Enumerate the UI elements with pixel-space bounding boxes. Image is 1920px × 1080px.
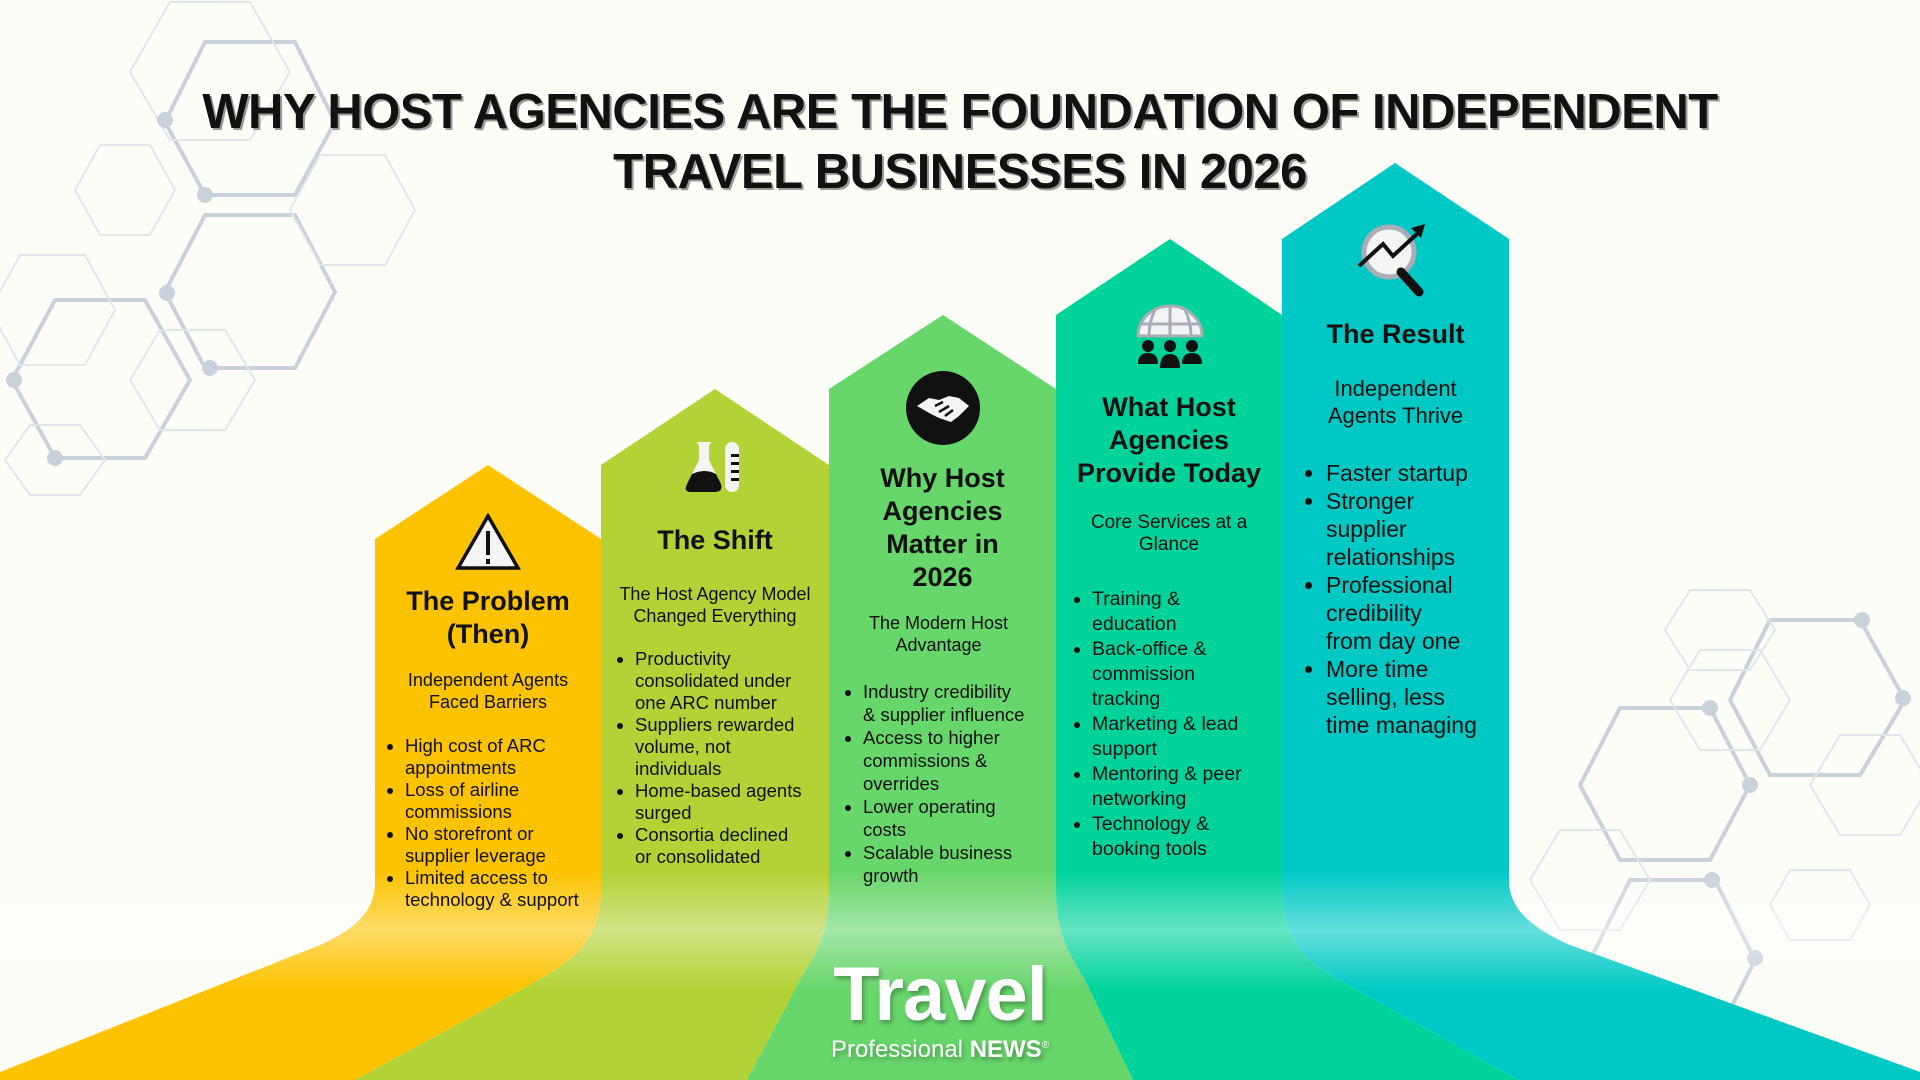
subtitle: Changed Everything	[633, 606, 797, 626]
subtitle: Faced Barriers	[429, 692, 547, 712]
bullet list	[1074, 588, 1242, 860]
subtitle	[619, 584, 811, 626]
icon: handshake	[906, 371, 980, 445]
bullet list: Faster startup	[1326, 460, 1468, 486]
icon: lab flask	[686, 442, 739, 492]
bullet list: Marketing & lead	[1092, 713, 1238, 735]
heading: The Shift	[657, 525, 773, 555]
heading	[406, 586, 570, 649]
title: WHY HOST AGENCIES ARE THE FOUNDATION OF INDEPENDENT	[202, 85, 1718, 139]
bullet list: costs	[863, 819, 906, 840]
subtitle	[1328, 376, 1463, 428]
bullet list: Training &	[1092, 588, 1180, 610]
panel: what host agencies provide	[1074, 304, 1261, 860]
subtitle: The Modern Host	[869, 613, 1008, 633]
bullet list: & supplier influence	[863, 704, 1024, 725]
column 1: problem	[0, 465, 601, 1080]
title: TRAVEL BUSINESSES IN 2026	[613, 145, 1307, 199]
bullet list: Scalable business	[863, 842, 1012, 863]
icon: magnifier with trend arrow	[1358, 224, 1425, 296]
heading: 2026	[912, 562, 973, 592]
bullet list: individuals	[635, 758, 721, 779]
column 5: result	[1282, 163, 1920, 1080]
subtitle: Advantage	[895, 635, 982, 655]
subtitle: The Host Agency Model	[619, 584, 811, 604]
heading	[1077, 392, 1261, 488]
bullet list: Professional	[1326, 572, 1453, 598]
bullet list: from day one	[1326, 628, 1460, 654]
bullet list: High cost of ARC	[405, 735, 546, 756]
column 2: shift	[355, 389, 829, 1080]
bullet list: networking	[1092, 788, 1186, 810]
subtitle: Core Services at a	[1091, 512, 1247, 533]
heading: Agencies	[1109, 425, 1229, 455]
bullet list: commissions &	[863, 750, 987, 771]
bullet list: education	[1092, 613, 1177, 635]
bullet list	[1305, 460, 1477, 738]
bullet list: Lower operating	[863, 796, 996, 817]
icon: globe with people	[1136, 304, 1204, 368]
bullet list	[387, 735, 579, 910]
bullet list: volume, not	[635, 736, 731, 757]
bullet list: commission	[1092, 663, 1195, 685]
subtitle	[869, 613, 1008, 655]
bullet list: appointments	[405, 757, 516, 778]
icon: warning	[455, 513, 521, 570]
logo: Travel Professional NEWS: Travel	[833, 952, 1047, 1037]
bullet list: one ARC number	[635, 692, 777, 713]
bullet list: No storefront or	[405, 823, 534, 844]
bullet list: Suppliers rewarded	[635, 714, 794, 735]
bullet list	[617, 648, 802, 867]
bullet list: supplier leverage	[405, 845, 546, 866]
subtitle: Independent	[1334, 376, 1457, 401]
heading	[880, 463, 1005, 592]
bullet list: Back-office &	[1092, 638, 1207, 660]
subtitle: Independent Agents	[408, 670, 568, 690]
bullet list: Consortia declined	[635, 824, 788, 845]
heading: What Host	[1102, 392, 1236, 422]
panel: why host agencies matter	[845, 371, 1024, 886]
column 3: why matter	[747, 315, 1133, 1080]
heading: The Problem	[406, 586, 570, 616]
bullet list: Loss of airline	[405, 779, 519, 800]
heading: (Then)	[447, 619, 529, 649]
bullet list: More time	[1326, 656, 1428, 682]
subtitle: Glance	[1139, 534, 1199, 555]
heading: Why Host	[880, 463, 1005, 493]
bullet list: selling, less	[1326, 684, 1445, 710]
bullet list: surged	[635, 802, 692, 823]
panel: the problem	[387, 513, 579, 910]
bullet list: supplier	[1326, 516, 1407, 542]
bullet list: Access to higher	[863, 727, 1000, 748]
logo: Travel Professional NEWS: Professional NEWS®	[831, 1036, 1049, 1063]
bullet list: Mentoring & peer	[1092, 763, 1242, 785]
bullet list: Industry credibility	[863, 681, 1011, 702]
panel: the result	[1305, 224, 1477, 738]
bullet list: or consolidated	[635, 846, 760, 867]
heading: The Result	[1326, 319, 1465, 349]
heading: Agencies	[882, 496, 1003, 526]
subtitle	[1091, 512, 1248, 555]
bullet list: tracking	[1092, 688, 1160, 710]
bullet list: growth	[863, 865, 919, 886]
bullet list: credibility	[1326, 600, 1422, 626]
bullet list: booking tools	[1092, 838, 1207, 860]
panel: the shift	[617, 442, 811, 867]
column 4: provide	[1056, 239, 1518, 1080]
bullet list: Stronger	[1326, 488, 1414, 514]
bullet list: Productivity	[635, 648, 731, 669]
title	[202, 85, 1720, 199]
heading: Provide Today	[1077, 458, 1261, 488]
subtitle: Agents Thrive	[1328, 403, 1463, 428]
bullet list	[845, 681, 1024, 886]
bullet list: Technology &	[1092, 813, 1209, 835]
bullet list: Home-based agents	[635, 780, 802, 801]
bullet list: support	[1092, 738, 1157, 760]
bullet list: consolidated under	[635, 670, 791, 691]
bullet list: commissions	[405, 801, 512, 822]
subtitle	[408, 670, 568, 712]
heading: Matter in	[886, 529, 999, 559]
bullet list: overrides	[863, 773, 939, 794]
bullet list: time managing	[1326, 712, 1477, 738]
bullet list: technology & support	[405, 889, 579, 910]
bullet list: Limited access to	[405, 867, 548, 888]
bullet list: relationships	[1326, 544, 1455, 570]
